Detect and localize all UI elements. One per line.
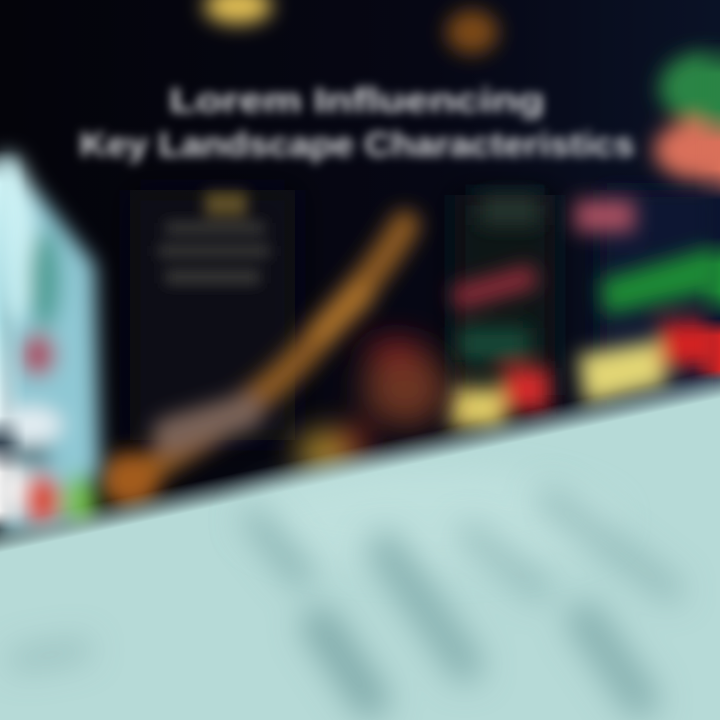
right stack stripes [575,52,720,405]
dark shelf panels [130,190,555,440]
right colourful stack [575,40,720,405]
left object blurred body [0,150,100,535]
right edge strip [694,40,720,380]
centre red and brown objects [297,340,447,472]
title [80,82,634,164]
centre stack of colours [450,195,549,428]
left light-blue object [0,150,100,535]
surface highlight [240,470,620,570]
right stack base [600,190,720,400]
mint surface [0,343,720,720]
top lights [204,0,498,54]
surface body with soft edge [0,343,720,720]
diagonal brown band [100,225,405,508]
title: Lorem Influencing [170,82,544,120]
surface stripes [20,500,670,700]
title: Key Landscape Characteristics [80,126,634,164]
left edge strip [0,150,26,530]
left panel text block [158,192,270,284]
